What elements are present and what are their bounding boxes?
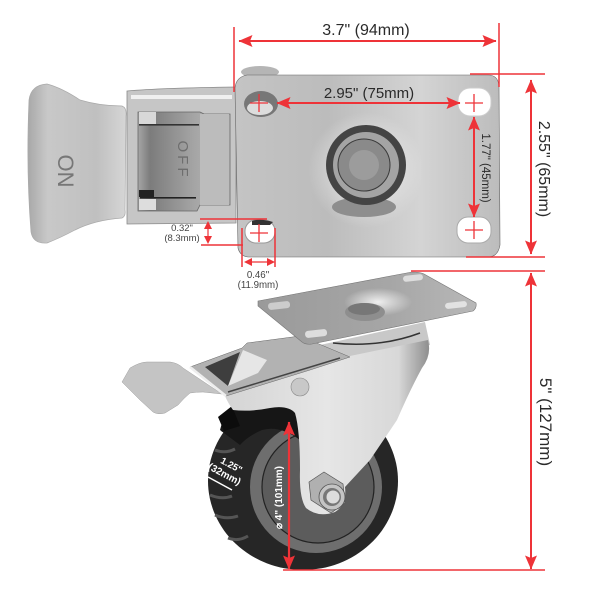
label: slot height: 0.32" <box>171 223 193 234</box>
top view caster plate assembly <box>28 66 500 257</box>
label: overall width: 3.7" (94mm) <box>322 22 410 39</box>
label: slot width: 0.46" <box>247 270 270 281</box>
small arrowheads <box>204 221 275 266</box>
lower caster <box>122 272 476 570</box>
wheel <box>206 392 398 570</box>
brake lever <box>122 336 350 414</box>
top plate <box>258 272 476 344</box>
label: hole spacing height: 1.77" (45mm) <box>479 133 491 203</box>
arrow: wheel diameter <box>288 422 290 569</box>
arrow: slot height <box>207 224 209 241</box>
label: hole spacing width: 2.95" (75mm) <box>324 85 414 102</box>
brake lever with ON mark: ON <box>53 154 78 188</box>
cross marks <box>250 94 483 242</box>
dimension lines <box>200 23 545 570</box>
arrow: slot width <box>248 261 270 263</box>
wheel width label: 1.25" <box>218 456 244 476</box>
brake lever with ON mark <box>28 84 126 243</box>
arrow: plate height <box>530 80 532 254</box>
label: plate height: 2.55" (65mm) <box>535 121 552 217</box>
axle nut <box>309 472 345 513</box>
fork <box>225 340 429 514</box>
arrow: total height <box>530 273 532 569</box>
dimension labels <box>164 22 555 466</box>
arrow: hole spacing width <box>277 102 460 104</box>
arrow: hole spacing height <box>473 117 475 217</box>
wheel width label: (32mm) <box>206 462 242 488</box>
wheel diameter label: ⌀ 4" (101mm) <box>274 466 285 529</box>
label: slot height: (8.3mm) <box>164 233 200 244</box>
bearing under plate <box>320 322 430 360</box>
mounting plate <box>235 75 500 257</box>
label: total height: 5" (127mm) <box>536 378 555 466</box>
arrow: overall plate width <box>239 40 496 42</box>
label: slot width: (11.9mm) <box>238 280 278 291</box>
extension lines <box>200 23 545 570</box>
brake frame with OFF mark <box>127 87 236 224</box>
brake frame with OFF mark: OFF <box>174 140 191 180</box>
bolt behind plate <box>241 66 279 78</box>
